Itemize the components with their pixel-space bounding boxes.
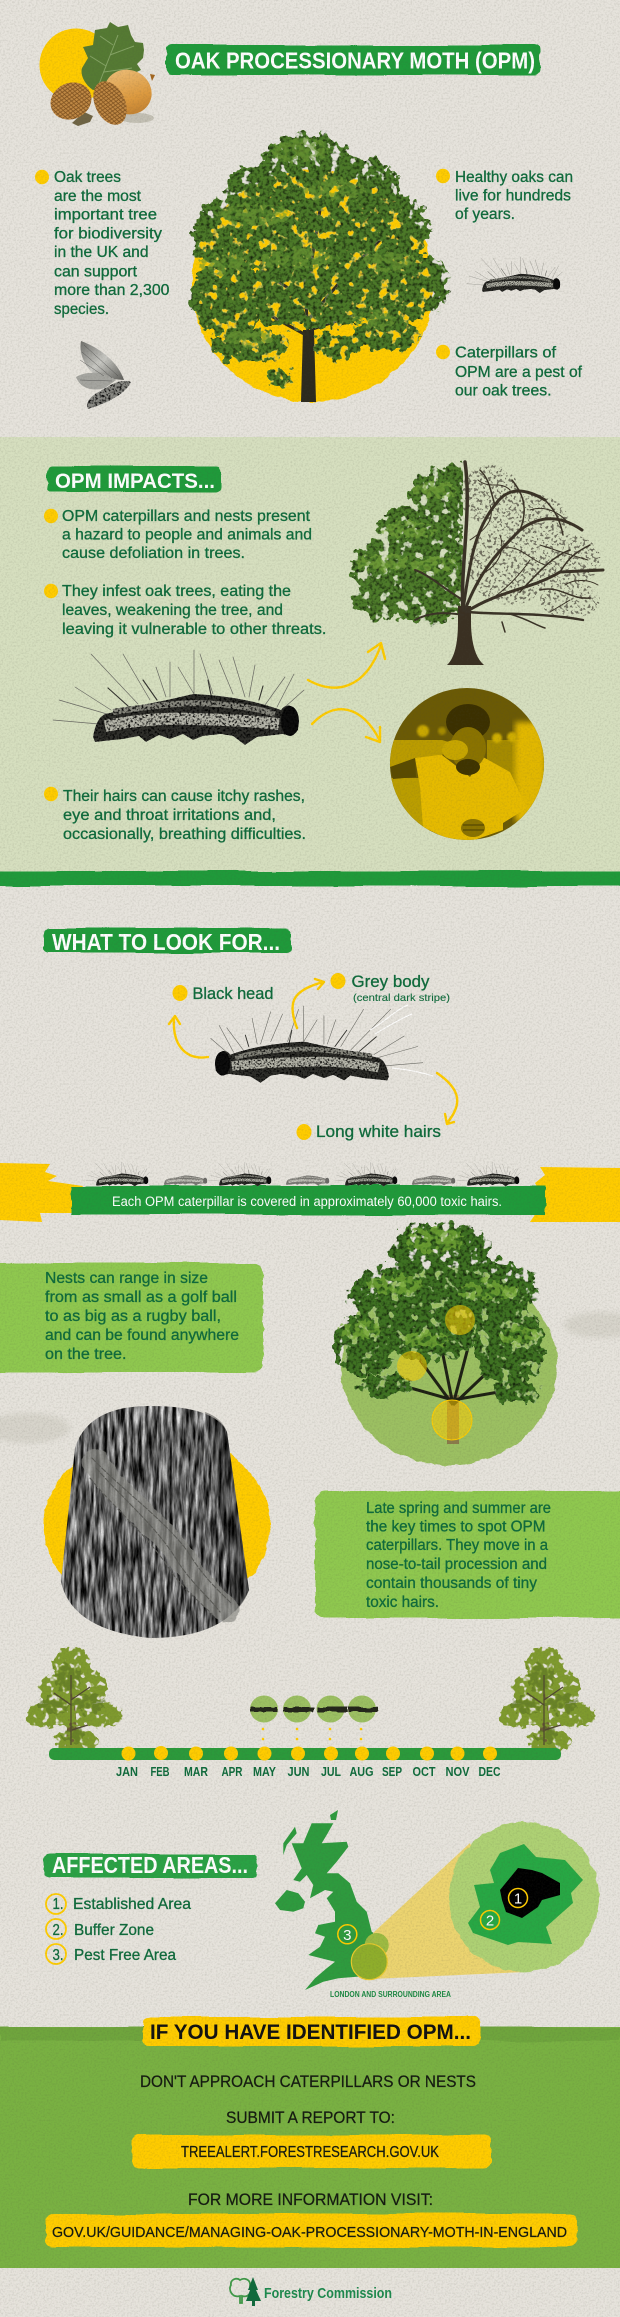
footer: Forestry Commission logo: [230, 2277, 392, 2306]
arrow: to grey body: [292, 979, 324, 1028]
legend: 3.: [52, 1947, 64, 1964]
link: tree alert: [132, 2135, 491, 2168]
text: infest oak trees: They infest oak trees, eating the: [62, 583, 291, 600]
arrow: caterpillar to person: [312, 709, 380, 742]
icon: oak leaf and acorns: [40, 22, 159, 130]
map: UK with zoom to London: [275, 1810, 599, 1999]
smudge right: [564, 1312, 620, 1338]
marker 3: 3: [343, 1927, 351, 1944]
illustration: processional nest on bark: [44, 1406, 270, 1638]
link: gov.uk guidance: GOV.UK/GUIDANCE/MANAGING-OAK-PROCESSIONARY-MOTH-IN-ENGLAND: [52, 2224, 567, 2241]
text: infest oak trees: leaving it vulnerable to other threats.: [62, 621, 326, 638]
month labels: DEC: [478, 1765, 500, 1779]
text box: nest sizes: from as small as a golf ball: [45, 1289, 237, 1306]
legend: Pest Free Area: [74, 1947, 176, 1964]
text: oak trees biodiversity: more than 2,300: [54, 282, 170, 299]
legend: [46, 1894, 191, 1964]
label: black head: Black head: [192, 984, 274, 1003]
section: what to look for: [0, 928, 620, 1222]
marker 3: [338, 1925, 357, 1944]
icon: small caterpillar: [467, 257, 562, 293]
text: submit a report: SUBMIT A REPORT TO:: [226, 2108, 395, 2127]
text: hazard: OPM caterpillars and nests present: [62, 508, 311, 525]
map caption: LONDON AND SURROUNDING AREA: [330, 1990, 451, 1999]
link: gov.uk guidance: [46, 2214, 577, 2247]
month labels: JAN: [116, 1765, 138, 1779]
section: introduction: [35, 22, 583, 409]
text box: when to spot: contain thousands of tiny: [366, 1575, 537, 1592]
banner: 60,000 toxic hairs: [0, 1162, 620, 1222]
month labels: AUG: [350, 1765, 374, 1779]
text: for more information: FOR MORE INFORMATION VISIT:: [188, 2190, 433, 2209]
text box: when to spot: the key times to spot OPM: [366, 1518, 546, 1536]
text: oak trees biodiversity: in the UK and: [54, 244, 148, 261]
icon: tree right: [499, 1647, 595, 1757]
logo wordmark: Forestry Commission: [264, 2286, 392, 2302]
banner: 60,000 toxic hairs: Each OPM caterpillar is covered in approximately 60,000 toxic hairs.: [112, 1194, 502, 1209]
text: hairs cause rashes: occasionally, breathing difficulties.: [63, 826, 306, 843]
text: oak trees biodiversity: can support: [54, 264, 138, 280]
smudge left: [0, 1413, 70, 1443]
illustration: annotated caterpillar: [211, 1005, 433, 1083]
month labels: MAR: [184, 1765, 208, 1779]
legend: 1.: [52, 1896, 64, 1913]
title: OAK PROCESSIONARY MOTH (OPM): [175, 48, 535, 74]
icon: tree logo: [230, 2277, 261, 2306]
text: hairs cause rashes: [44, 787, 306, 843]
text: hazard: a hazard to people and animals and: [62, 526, 312, 544]
label: long white hairs: Long white hairs: [316, 1122, 441, 1141]
text: oak trees biodiversity: Oak trees: [54, 169, 121, 186]
text: healthy oaks: [436, 169, 573, 223]
arrow: to long white hairs: [437, 1073, 457, 1124]
text box: nest sizes: on the tree.: [45, 1346, 126, 1363]
marker 1: [508, 1888, 528, 1908]
illustration: tree with nest locations: [333, 1222, 557, 1465]
text: don't approach: DON'T APPROACH CATERPILLARS OR NESTS: [140, 2072, 476, 2091]
icon: moth: [76, 341, 131, 409]
label: grey body: [330, 972, 450, 1004]
text box: nest sizes: to as big as a rugby ball,: [45, 1308, 221, 1325]
arrow: to black head: [169, 1016, 208, 1058]
month labels: NOV: [446, 1765, 470, 1779]
panel: if you have identified OPM: [0, 2017, 620, 2268]
text box: when to spot: Late spring and summer are: [366, 1500, 551, 1517]
illustration: oak tree on yellow circle: [190, 133, 449, 402]
arrow: caterpillar to tree: [308, 643, 385, 688]
text: hazard: [44, 508, 312, 562]
marker 2: [480, 1910, 500, 1930]
timeline: months: [26, 1647, 595, 1779]
text: oak trees biodiversity: [35, 169, 170, 318]
text: hairs cause rashes: eye and throat irritations and,: [63, 807, 276, 824]
text box: when to spot: toxic hairs.: [366, 1594, 439, 1611]
text: infest oak trees: [44, 583, 326, 638]
text: caterpillars are a pest: OPM are a pest of: [455, 364, 583, 381]
month dots: [122, 1746, 497, 1760]
heading: what to look for: WHAT TO LOOK FOR...: [52, 929, 280, 955]
heading: affected areas: AFFECTED AREAS...: [52, 1852, 248, 1878]
month labels: MAY: [253, 1765, 277, 1779]
marker 1: 1: [514, 1890, 522, 1908]
legend: Established Area: [73, 1896, 191, 1913]
section: affected areas: [44, 1810, 599, 1999]
text: caterpillars are a pest: our oak trees.: [455, 382, 552, 400]
legend: 2.: [52, 1922, 64, 1939]
text: hairs cause rashes: Their hairs can cause itchy rashes,: [63, 788, 305, 805]
text box: nest sizes: and can be found anywhere: [45, 1327, 239, 1344]
heading: OPM impacts: OPM IMPACTS...: [55, 470, 215, 493]
text: healthy oaks: Healthy oaks can: [455, 169, 573, 186]
text: healthy oaks: live for hundreds: [455, 188, 571, 204]
text: healthy oaks: of years.: [455, 206, 515, 223]
text box: when to spot: [315, 1491, 620, 1618]
marker 2: 2: [486, 1912, 494, 1930]
label: grey body: Grey body: [352, 972, 430, 991]
text: hazard: cause defoliation in trees.: [62, 545, 245, 562]
label: grey body: (central dark stripe): [353, 992, 450, 1004]
text: oak trees biodiversity: for biodiversity: [54, 226, 162, 242]
text box: when to spot: nose-to-tail procession and: [366, 1556, 547, 1573]
illustration: man rubbing eye: [390, 688, 544, 840]
timeline bar: [49, 1748, 561, 1760]
text box: nest sizes: Nests can range in size: [45, 1270, 208, 1287]
icons: caterpillar season markers May to August: [250, 1696, 378, 1740]
icon: tree left: [26, 1647, 122, 1757]
month labels: [116, 1765, 500, 1779]
text box: nest sizes: [0, 1263, 263, 1373]
illustration: half leafy half bare tree: [351, 462, 603, 665]
legend: Buffer Zone: [74, 1922, 154, 1939]
month labels: JUN: [288, 1765, 310, 1779]
section: nests: [0, 1222, 620, 1638]
month labels: APR: [222, 1765, 242, 1779]
text: caterpillars are a pest: Caterpillars of: [455, 344, 557, 362]
panel: OPM impacts: [0, 437, 620, 886]
link: tree alert: TREEALERT.FORESTRESEARCH.GOV.UK: [181, 2144, 440, 2161]
text: infest oak trees: leaves, weakening the tree, and: [62, 602, 283, 619]
month labels: OCT: [412, 1765, 436, 1779]
month labels: SEP: [382, 1765, 402, 1779]
text: caterpillars are a pest: [436, 344, 583, 400]
month labels: FEB: [150, 1765, 170, 1779]
text box: when to spot: caterpillars. They move in a: [366, 1537, 548, 1554]
heading: if you have identified OPM: IF YOU HAVE IDENTIFIED OPM...: [150, 2021, 471, 2044]
text: oak trees biodiversity: are the most: [54, 188, 142, 205]
text: oak trees biodiversity: important tree: [54, 206, 157, 224]
month labels: JUL: [321, 1765, 341, 1779]
illustration: large caterpillar: [53, 650, 304, 745]
text: oak trees biodiversity: species.: [54, 301, 109, 318]
